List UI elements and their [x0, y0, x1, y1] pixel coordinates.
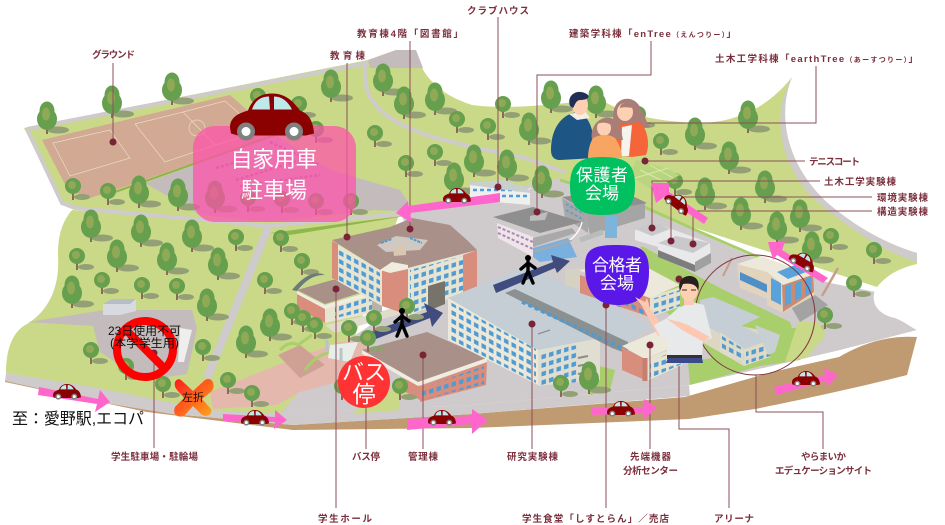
building: 実験棟 group: [635, 222, 711, 272]
label: 研究実験棟: 研究実験棟: [507, 451, 558, 463]
bus stop circle: バス: [342, 360, 386, 385]
panel: 自家用車駐車場: [193, 94, 356, 222]
bubble: 保護者会場: [570, 157, 635, 215]
label: 先端機器分析センター: [623, 451, 678, 477]
athletic ground: [42, 95, 275, 198]
walking figures: [395, 255, 535, 336]
no entry sign: (本学学生用): [110, 336, 179, 350]
building: earthTree: [562, 190, 647, 238]
outer north road: [27, 62, 565, 226]
no entry sign: 23日使用不可: [108, 323, 181, 338]
building: student parking hut: [103, 299, 192, 362]
presenter illustration: [635, 276, 712, 363]
label: 学生ホール: 学生ホール: [318, 513, 372, 525]
label: 管理棟: 管理棟: [408, 451, 438, 463]
bubble: 合格者会場: 合格者: [592, 256, 642, 275]
building: 合格者会場 back block: [565, 262, 680, 317]
label: バス停: バス停: [352, 451, 380, 463]
bus stop circle: 停: [352, 381, 376, 407]
bubble: 保護者会場: 会場: [585, 184, 619, 203]
road over embankment top: [5, 373, 690, 425]
left turn prohibited mark: [174, 379, 214, 417]
white notch: [874, 264, 930, 330]
car park surface: [145, 135, 415, 222]
label: 教育棟4階図書館: 教育棟4階「図書館」: [357, 28, 463, 40]
building: enTree: [493, 207, 603, 262]
label: やらまいかエデュケーションサイト: [775, 452, 872, 477]
bubble: 合格者会場: 会場: [600, 274, 634, 293]
lower left green land: [6, 210, 400, 414]
panel: 自家用車駐車場: 自家用車: [230, 147, 318, 172]
tennis court: [630, 160, 680, 190]
bus stop circle: [338, 356, 390, 408]
green around arena: [640, 245, 830, 385]
label: 土木工学実験棟: 土木工学実験棟: [824, 176, 896, 188]
building: やらまいかエデュケーションサイト: [737, 256, 828, 322]
building: クラブハウス: [470, 180, 530, 205]
upper green land: [24, 50, 917, 300]
label: 土木工学科棟 earthTree: 土木工学科棟「earthTree（あーすつりー）」: [715, 53, 918, 65]
building: アリーナ: [700, 297, 780, 366]
car park rows: [216, 142, 320, 186]
trees: [37, 64, 891, 407]
circle marking education site: [695, 255, 815, 375]
label: 構造実験棟: 構造実験棟: [877, 206, 928, 218]
student car park surface: [28, 310, 197, 378]
no entry sign: [108, 321, 181, 377]
label: 教育棟: 教育棟: [330, 50, 365, 62]
diagonal road: [207, 228, 268, 378]
bubble: 合格者会場: [585, 245, 649, 305]
bubble: 保護者会場: 保護者: [576, 166, 628, 185]
building: 管理棟: [362, 332, 487, 402]
plaza: [210, 342, 370, 409]
label: 学生食堂しすとらん売店: 学生食堂「しすとらん」／売店: [522, 513, 669, 525]
label: 建築学科棟 enTree: 建築学科棟「enTree（えんつりー）」: [569, 28, 736, 40]
building: 先端機器分析センター: [622, 325, 690, 381]
label: 学生駐車場・駐輪場: 学生駐車場・駐輪場: [111, 451, 198, 463]
left turn prohibited mark: 左折: [182, 390, 204, 404]
family illustration: [551, 92, 650, 160]
building: 教育棟: [332, 218, 477, 316]
label: 先端機器分析センター: 先端機器: [630, 451, 671, 463]
panel: 自家用車駐車場: 駐車場: [241, 178, 307, 203]
label: グラウンド: グラウンド: [92, 49, 135, 61]
big car icon: [230, 94, 314, 140]
dark green strips: [270, 195, 560, 235]
label: アリーナ: アリーナ: [714, 514, 754, 525]
label: 環境実験棟: 環境実験棟: [877, 192, 928, 204]
label: クラブハウス: クラブハウス: [467, 5, 529, 17]
label: やらまいかエデュケーションサイト: エデュケーションサイト: [775, 465, 872, 477]
pink route arrows: [38, 183, 838, 434]
embankment: [5, 337, 917, 430]
campus ground: [5, 50, 930, 430]
building: 学生ホール: [292, 273, 430, 333]
label: やらまいかエデュケーションサイト: やらまいか: [801, 452, 846, 463]
direction note: 至：愛野駅,エコパ: [12, 410, 144, 428]
building: 研究実験棟: [448, 266, 650, 397]
label: テニスコート: テニスコート: [809, 157, 860, 168]
trees in front: [284, 298, 424, 352]
leader lines: [110, 17, 872, 508]
small cars: [53, 188, 820, 426]
label: 先端機器分析センター: 分析センター: [623, 465, 678, 477]
central campus surface: [280, 178, 917, 414]
right road: [723, 258, 732, 276]
navy walking arrows: [367, 255, 570, 342]
